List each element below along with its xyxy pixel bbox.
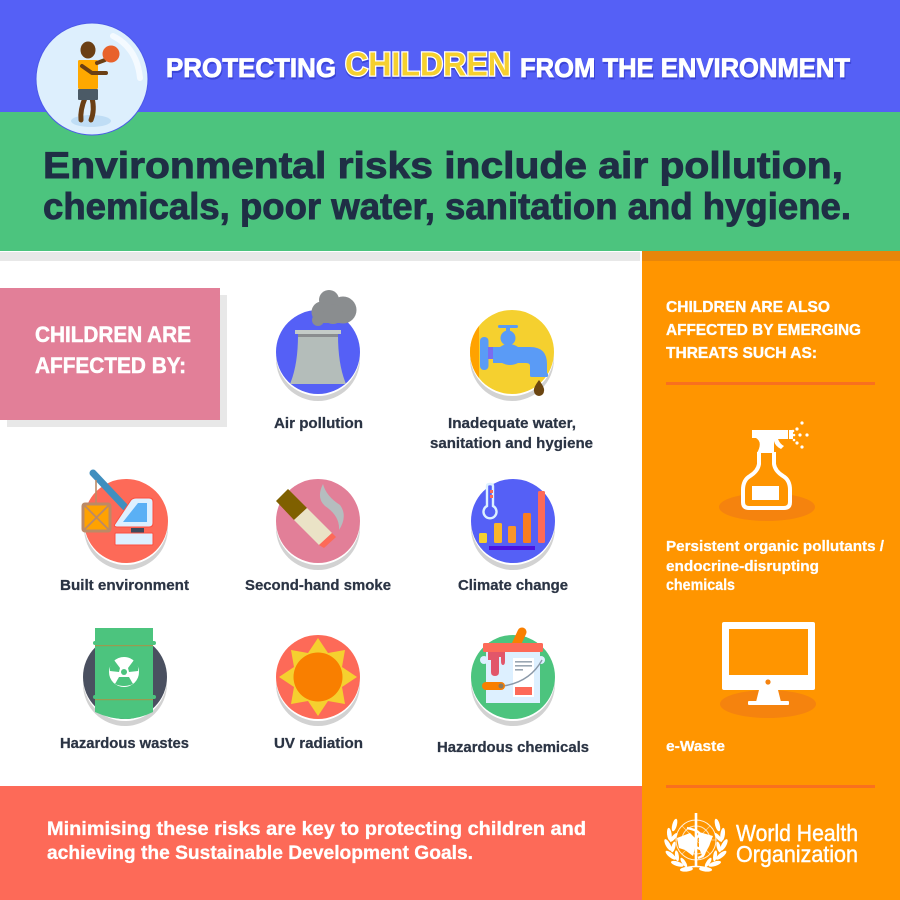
- icon: hazardous chemicals paint bucket: [471, 632, 555, 726]
- panel: bottom message: achieving the Sustainable Development Goals.: [47, 843, 473, 864]
- WHO logo: [663, 813, 858, 876]
- panel: children are affected by: [0, 288, 227, 427]
- icon: UV radiation sun: [276, 635, 360, 726]
- label: water and sanitation: sanitation and hygiene: [430, 436, 593, 452]
- label: persistent organic pollutants: endocrine-disrupting: [666, 559, 819, 575]
- wordmark: World Health: [736, 820, 858, 846]
- label: persistent organic pollutants: chemicals: [666, 577, 735, 594]
- title: PROTECTING: [166, 53, 336, 83]
- header band: [0, 0, 900, 112]
- label: built environment: Built environment: [60, 578, 189, 594]
- label: UV radiation: UV radiation: [274, 736, 363, 752]
- icon: climate change: [471, 479, 555, 570]
- panel: bottom message: [0, 786, 642, 900]
- label: water and sanitation: [430, 416, 593, 452]
- title: FROM THE ENVIRONMENT: [521, 55, 851, 85]
- icon: built environment: [83, 473, 168, 570]
- title: CHILDREN: [345, 46, 511, 82]
- title: [166, 46, 851, 85]
- icon: second-hand smoke: [276, 479, 360, 570]
- label: climate change: Climate change: [458, 578, 568, 594]
- label: water and sanitation: Inadequate water,: [448, 416, 576, 432]
- label: second-hand smoke: Second-hand smoke: [245, 578, 391, 594]
- icon: tap with dirty water: [470, 300, 554, 401]
- emerging threats heading: CHILDREN ARE ALSO: [666, 299, 830, 316]
- panel: children are affected by: CHILDREN ARE: [35, 322, 191, 347]
- title: FROM THE ENVIRONMENT: [520, 53, 850, 83]
- emerging threats heading: [666, 299, 861, 362]
- title: CHILDREN: [345, 48, 511, 84]
- icon: child in bubble: [36, 23, 148, 135]
- headline: Environmental risks include air pollution,: [43, 145, 843, 186]
- label: hazardous chemicals: Hazardous chemicals: [437, 740, 589, 756]
- label: hazardous wastes: Hazardous wastes: [60, 736, 189, 752]
- icon: air pollution: [276, 290, 360, 401]
- label: e-waste: e-Waste: [666, 739, 725, 755]
- icon: hazardous wastes barrel: [83, 628, 167, 726]
- icon: spray bottle: [719, 421, 815, 521]
- emerging threats heading: THREATS SUCH AS:: [666, 345, 817, 362]
- headline second line: chemicals, poor water, sanitation and hygiene.: [43, 186, 851, 227]
- title: PROTECTING: [167, 55, 337, 85]
- wordmark: Organization: [736, 841, 858, 867]
- green headline band: [0, 112, 900, 251]
- emerging threats heading: AFFECTED BY EMERGING: [666, 322, 861, 339]
- emblem: [663, 813, 729, 876]
- icon: computer monitor: [720, 622, 816, 718]
- panel: right orange column: [0, 251, 900, 900]
- panel: bottom message: Minimising these risks are key to protecting children and: [47, 819, 586, 840]
- label: persistent organic pollutants: Persistent organic pollutants /: [666, 539, 884, 555]
- wordmark: [736, 820, 858, 867]
- label: persistent organic pollutants: [666, 539, 884, 594]
- panel: children are affected by: AFFECTED BY:: [35, 353, 186, 378]
- label: air pollution: Air pollution: [274, 416, 363, 432]
